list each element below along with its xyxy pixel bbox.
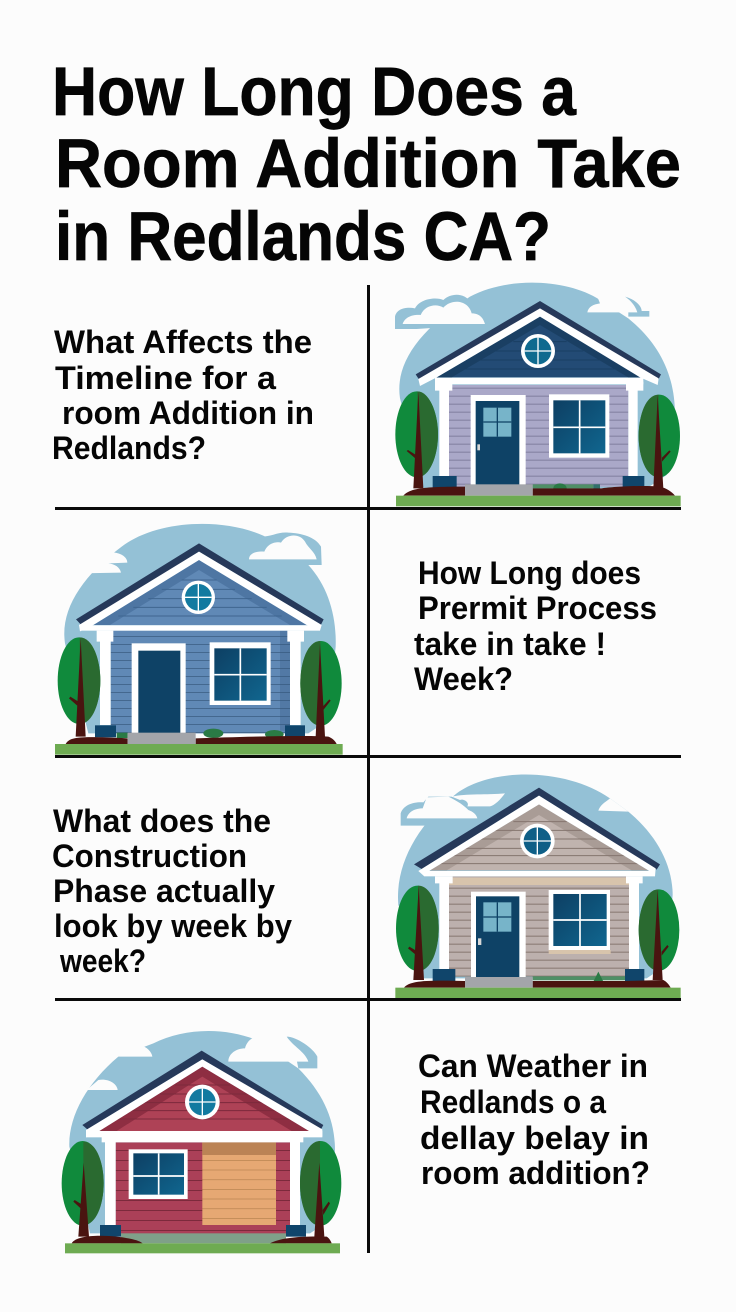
lawn <box>55 744 343 755</box>
wall <box>116 1142 290 1234</box>
clouds <box>75 533 322 573</box>
panel 4 heading: weather delays: dellay belay in <box>420 1120 649 1156</box>
mulch <box>404 980 671 988</box>
roof <box>416 301 661 386</box>
columns <box>97 631 304 725</box>
panel 3 heading: construction phase: Construction <box>52 838 247 874</box>
door <box>471 395 526 485</box>
panel 1 heading: what affects the timeline: Timeline for a <box>55 360 276 396</box>
panel 2 heading: permit process: take in take ! <box>414 626 606 662</box>
panel 1 heading: what affects the timeline: Redlands? <box>52 430 206 466</box>
panel 2 heading: permit process: Week? <box>414 661 513 697</box>
mulch <box>72 1236 332 1243</box>
title: How Long Does a <box>52 53 577 130</box>
lawn <box>65 1243 340 1253</box>
door <box>471 892 526 978</box>
lawn <box>395 988 681 998</box>
sky <box>64 524 336 733</box>
mulch <box>403 486 675 496</box>
clouds <box>395 292 649 329</box>
roof <box>82 1051 323 1142</box>
gable <box>437 317 642 377</box>
gable <box>93 560 307 625</box>
round window <box>182 581 215 614</box>
columns <box>105 1142 300 1225</box>
wall <box>449 876 629 977</box>
door <box>132 643 186 733</box>
icon: beige house <box>395 775 681 998</box>
wall <box>448 385 628 487</box>
panel 4 heading: weather delays: Can Weather in <box>418 1048 648 1084</box>
panel 2 heading: permit process <box>414 555 657 697</box>
window <box>549 394 609 458</box>
wall <box>111 631 290 733</box>
columns <box>435 876 643 969</box>
trees <box>396 886 679 980</box>
panel 4 heading: weather delays: Redlands o a <box>420 1084 606 1120</box>
columns <box>435 382 643 477</box>
window <box>210 642 271 705</box>
trees <box>62 1141 341 1237</box>
panel 2 heading: permit process: How Long does <box>418 555 641 591</box>
title: Room Addition Take <box>55 125 681 202</box>
trees <box>395 391 680 488</box>
planters and shrubs <box>433 476 644 495</box>
trees <box>58 637 342 737</box>
step <box>465 484 533 496</box>
panel 1 heading: what affects the timeline <box>52 324 314 466</box>
lawn <box>396 496 681 506</box>
icon: blue house <box>55 524 343 755</box>
grid dividers <box>55 285 681 1253</box>
panel 3 heading: construction phase <box>52 803 292 979</box>
roof <box>76 543 324 631</box>
roof <box>414 788 660 876</box>
garage panel <box>202 1142 276 1225</box>
sky <box>399 283 675 488</box>
clouds <box>87 1036 317 1090</box>
title: in Redlands CA? <box>55 198 551 275</box>
planters and shrubs <box>95 725 305 739</box>
round window <box>185 1085 220 1119</box>
window <box>129 1149 188 1199</box>
panel 2 heading: permit process: Prermit Process <box>418 590 657 626</box>
planters and foundation <box>100 1225 306 1243</box>
round window <box>520 824 555 858</box>
panel 3 heading: construction phase: Phase actually <box>53 873 275 909</box>
step <box>465 977 533 988</box>
panel 1 heading: what affects the timeline: What Affects the <box>54 324 312 360</box>
gable <box>99 1067 309 1131</box>
clouds <box>401 793 628 826</box>
icon: lavender house <box>395 283 681 506</box>
title <box>52 53 681 275</box>
mulch <box>66 736 337 744</box>
sky <box>69 1031 335 1233</box>
panel 4 heading: weather delays <box>418 1048 650 1191</box>
step <box>128 733 196 744</box>
icon: red house <box>62 1031 341 1253</box>
sky <box>398 775 673 978</box>
panel 3 heading: construction phase: What does the <box>53 803 271 839</box>
round window <box>521 334 555 368</box>
panel 3 heading: construction phase: look by week by <box>54 908 292 944</box>
panel 3 heading: construction phase: week? <box>59 943 146 979</box>
planters and shrubs <box>433 969 644 982</box>
panel 4 heading: weather delays: room addition? <box>421 1155 650 1191</box>
panel 1 heading: what affects the timeline: room Addition in <box>62 395 314 431</box>
gable <box>430 804 648 870</box>
window <box>549 890 611 954</box>
